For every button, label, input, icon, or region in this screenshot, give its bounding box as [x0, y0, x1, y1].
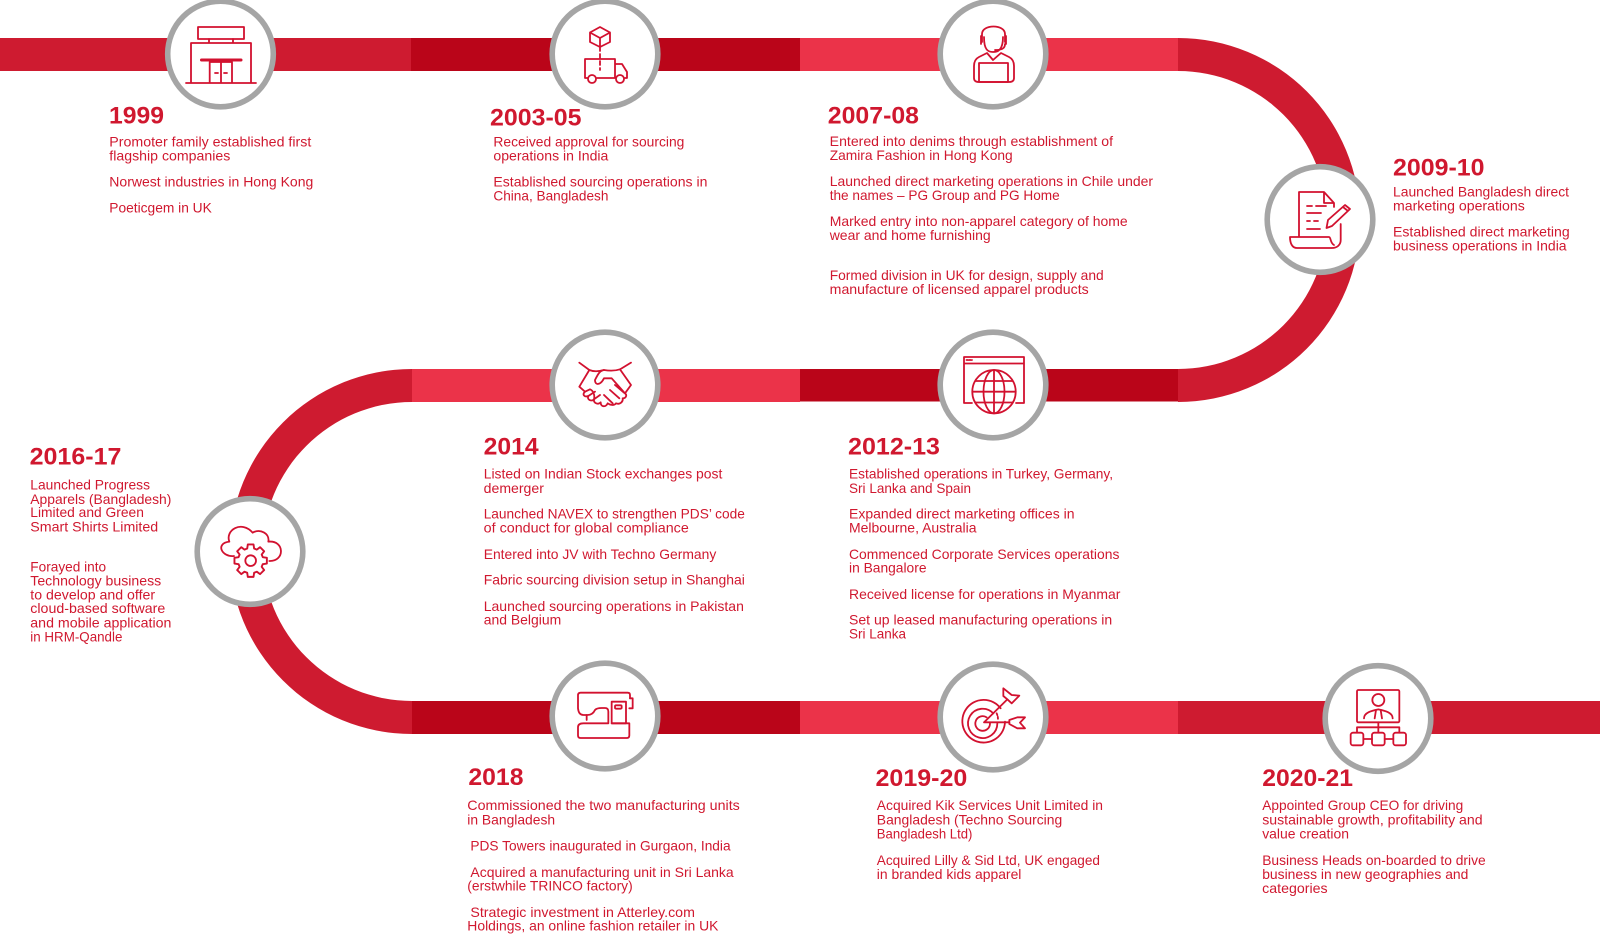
- description 2018: Holdings, an online fashion retailer in UK: [467, 918, 719, 934]
- description 2007-08: wear and home furnishing: [829, 227, 991, 243]
- description 2012-13: Commenced Corporate Services operations: [849, 546, 1119, 562]
- year 2009-10: 2009-10: [1393, 154, 1484, 181]
- description 2003-05: China, Bangladesh: [493, 188, 608, 204]
- milestone 2019-20: [876, 664, 1103, 882]
- year 2020-21: 2020-21: [1262, 765, 1353, 792]
- year 2012-13: 2012-13: [848, 434, 940, 460]
- description 2018: [467, 797, 740, 934]
- node circle 2020-21: [1325, 666, 1431, 771]
- node circle 2009-10: [1267, 167, 1373, 272]
- description 2018: in Bangladesh: [467, 811, 555, 827]
- description 2009-10: business operations in India: [1393, 238, 1567, 254]
- milestone 2003-05: [490, 1, 707, 204]
- icon: handshake: [579, 363, 631, 406]
- description 2003-05: Established sourcing operations in: [493, 174, 707, 190]
- description 2014: Fabric sourcing division setup in Shanghai: [484, 571, 745, 587]
- description 2007-08: Launched direct marketing operations in Chile under: [830, 173, 1153, 189]
- description 2016-17: Smart Shirts Limited: [30, 518, 158, 534]
- description 2016-17: to develop and offer: [30, 587, 155, 603]
- milestone 2016-17: [30, 444, 303, 645]
- description 2019-20: Acquired Kik Services Unit Limited in: [877, 797, 1103, 813]
- icon: document and pen: [1290, 192, 1350, 248]
- node circle 2018: [552, 663, 658, 769]
- description 1999: [109, 134, 313, 216]
- description 1999: Norwest industries in Hong Kong: [109, 174, 313, 190]
- description 2012-13: Expanded direct marketing offices in: [849, 505, 1074, 521]
- milestone 2012-13: [848, 332, 1121, 642]
- icon: cube and truck: [585, 27, 627, 83]
- description 2019-20: Bangladesh Ltd): [877, 826, 972, 842]
- description 2007-08: Marked entry into non-apparel category of home: [830, 213, 1128, 229]
- description 2020-21: [1262, 797, 1486, 896]
- description 2020-21: sustainable growth, profitability and: [1262, 811, 1483, 827]
- description 2016-17: and mobile application: [30, 614, 171, 630]
- milestone 2014: [484, 332, 745, 627]
- milestone 1999: [109, 1, 313, 216]
- node circle 1999: [168, 1, 273, 107]
- description 2020-21: Business Heads on-boarded to drive: [1262, 852, 1486, 868]
- year 1999: 1999: [109, 102, 164, 130]
- description 2014: Entered into JV with Techno Germany: [484, 546, 716, 562]
- description 2009-10: [1393, 184, 1570, 254]
- description 1999: flagship companies: [109, 148, 230, 164]
- description 2016-17: Launched Progress: [30, 477, 150, 493]
- description 2012-13: Established operations in Turkey, Germany,: [849, 466, 1113, 482]
- description 2012-13: Set up leased manufacturing operations in: [849, 611, 1112, 627]
- description 2014: Launched sourcing operations in Pakistan: [484, 598, 744, 614]
- icon: monitor with org chart: [1351, 690, 1406, 745]
- description 2003-05: [493, 134, 707, 204]
- description 1999: Promoter family established first: [109, 134, 311, 150]
- description 2014: Launched NAVEX to strengthen PDS’ code: [484, 505, 745, 521]
- description 2014: and Belgium: [484, 611, 561, 627]
- icon: cloud with gear: [221, 527, 281, 577]
- description 2003-05: Received approval for sourcing: [493, 134, 684, 150]
- year 2014: 2014: [484, 434, 539, 460]
- description 2007-08: manufacture of licensed apparel products: [830, 281, 1089, 297]
- description 2018: (erstwhile TRINCO factory): [467, 878, 633, 894]
- description 2018: Acquired a manufacturing unit in Sri Lanka: [470, 864, 734, 880]
- description 2018: PDS Towers inaugurated in Gurgaon, India: [470, 838, 731, 854]
- description 2019-20: in branded kids apparel: [877, 866, 1021, 882]
- description 2007-08: [829, 133, 1153, 297]
- node circle 2014: [552, 332, 658, 438]
- description 2016-17: Technology business: [30, 573, 161, 589]
- description 2014: demerger: [484, 480, 544, 496]
- milestone 2009-10: [1267, 154, 1570, 272]
- milestone 2018: [467, 663, 740, 934]
- description 1999: Poeticgem in UK: [109, 200, 212, 216]
- description 2009-10: marketing operations: [1393, 198, 1525, 214]
- description 2007-08: Zamira Fashion in Hong Kong: [830, 147, 1013, 163]
- description 2009-10: Launched Bangladesh direct: [1393, 184, 1569, 200]
- year 2016-17: 2016-17: [30, 444, 121, 470]
- icon: sewing machine: [578, 693, 633, 738]
- description 2016-17: cloud-based software: [30, 600, 166, 616]
- description 2007-08: the names – PG Group and PG Home: [830, 187, 1060, 203]
- description 2016-17: Limited and Green: [30, 504, 144, 520]
- description 2014: of conduct for global compliance: [484, 520, 689, 536]
- description 2012-13: Received license for operations in Myanmar: [849, 586, 1121, 602]
- description 2020-21: categories: [1262, 880, 1328, 896]
- description 2016-17: in HRM-Qandle: [30, 629, 123, 645]
- year 2003-05: 2003-05: [490, 104, 582, 132]
- description 2018: Strategic investment in Atterley.com: [470, 904, 695, 920]
- description 2016-17: Forayed into: [30, 558, 106, 574]
- description 2019-20: Bangladesh (Techno Sourcing: [877, 811, 1062, 827]
- icon: browser window with globe: [964, 357, 1024, 413]
- node circle 2003-05: [552, 1, 658, 107]
- year 2007-08: 2007-08: [828, 102, 919, 130]
- node circle 2016-17: [197, 499, 303, 604]
- description 2014: Listed on Indian Stock exchanges post: [484, 466, 723, 482]
- description 2007-08: Entered into denims through establishment of: [830, 133, 1113, 149]
- description 2012-13: in Bangalore: [849, 559, 927, 575]
- year 2019-20: 2019-20: [876, 765, 967, 792]
- description 2007-08: Formed division in UK for design, supply and: [830, 267, 1104, 283]
- description 2003-05: operations in India: [493, 148, 609, 164]
- icon: target with arrows: [962, 688, 1025, 743]
- description 2020-21: Appointed Group CEO for driving: [1262, 797, 1463, 813]
- description 2019-20: Acquired Lilly & Sid Ltd, UK engaged: [877, 852, 1100, 868]
- description 2016-17: Apparels (Bangladesh): [30, 491, 171, 507]
- description 2016-17: [30, 477, 171, 645]
- icon: headset agent with laptop: [974, 26, 1014, 82]
- milestone 2007-08: [828, 1, 1153, 297]
- description 2020-21: value creation: [1262, 826, 1349, 842]
- icon: storefront: [186, 27, 256, 83]
- description 2012-13: Melbourne, Australia: [849, 520, 977, 536]
- description 2012-13: [849, 466, 1121, 642]
- description 2014: [484, 466, 745, 627]
- description 2012-13: Sri Lanka: [849, 626, 906, 642]
- description 2018: Commissioned the two manufacturing units: [467, 797, 740, 813]
- node circle 2012-13: [940, 332, 1046, 438]
- description 2009-10: Established direct marketing: [1393, 224, 1570, 240]
- description 2012-13: Sri Lanka and Spain: [849, 480, 971, 496]
- node circle 2007-08: [940, 1, 1046, 107]
- description 2019-20: [877, 797, 1103, 882]
- description 2020-21: business in new geographies and: [1262, 866, 1468, 882]
- year 2018: 2018: [468, 764, 524, 791]
- milestone 2020-21: [1262, 666, 1486, 896]
- timeline road: [0, 38, 1600, 734]
- node circle 2019-20: [940, 664, 1046, 770]
